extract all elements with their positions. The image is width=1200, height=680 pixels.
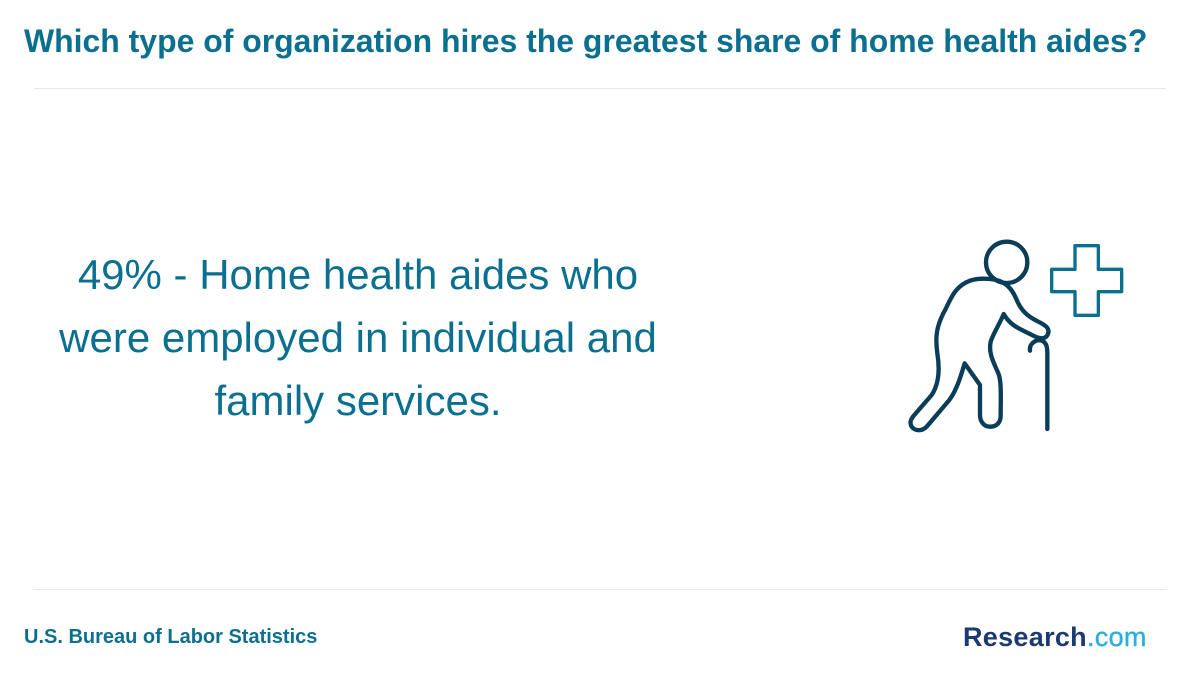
- icon: elderly person: [910, 242, 1049, 430]
- logo: Research.com: Research.com: [963, 622, 1147, 652]
- source text: U.S. Bureau of Labor Statistics: [24, 626, 317, 648]
- main statistic text: were employed in individual and: [59, 314, 657, 361]
- main statistic text: [59, 251, 657, 424]
- icon: medical cross: [1052, 246, 1122, 315]
- main statistic text: 49% - Home health aides who: [78, 251, 638, 298]
- title: Which type of organization hires the greatest share of home health aides?: [24, 23, 1147, 59]
- main statistic text: family services.: [214, 377, 502, 424]
- icon: elderly person with cane and medical cross: [908, 240, 1124, 432]
